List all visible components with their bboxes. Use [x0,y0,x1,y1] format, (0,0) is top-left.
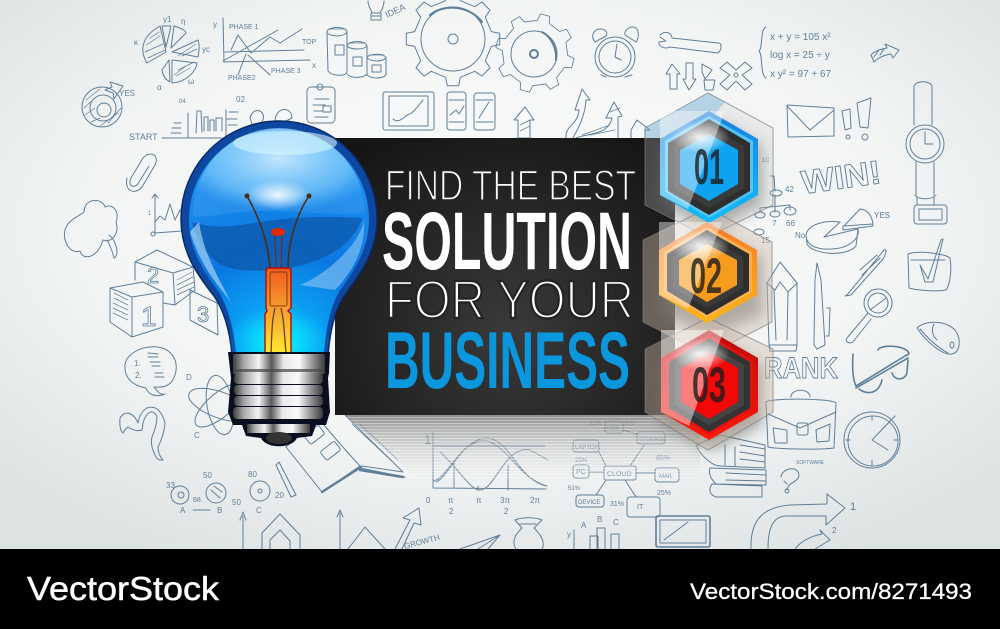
badge 01 [660,111,758,223]
doodle: equations: log x = 25 ÷ y [770,50,830,61]
doodle: 3D pie: No [795,231,806,240]
doodle: pie chart: γc [202,45,210,54]
doodle: pie chart: κ [134,38,139,47]
doodle: small pies: 20 [275,491,284,500]
filament bead [271,228,285,236]
doodle: small 3D bars: A [581,521,587,530]
doodle: small pies: A [180,506,186,515]
doodle: cloud diagram: 25% [575,458,588,464]
doodle: phase chart: x [312,61,316,70]
doodle: bar chart with start: 04 [179,99,186,105]
doodle: small 3D bars: y [567,530,571,539]
doodle: alarm clock [593,27,638,77]
doodle: large gear [406,0,500,86]
doodle: phase chart: PHASE2 [228,75,256,82]
doodle: sine wave chart: 2 [449,507,454,516]
badge 02 [659,222,757,323]
doodle: small pies: B [217,506,222,515]
doodle: large right arrow: 2 [832,526,837,535]
doodle: small curved arrow [871,44,899,62]
doodle: large right arrow [751,494,856,549]
doodle: 3D pie: YES [874,211,890,220]
dark crescent reflection [192,217,362,271]
doodle: cloud diagram: USB [607,426,619,432]
doodle: question [781,460,825,493]
black panel [335,138,675,415]
doodle: paper plane and money bag [460,518,543,549]
metal screw base [228,352,330,446]
doodle: bar chart with start: 02 [236,95,245,104]
badge 03 [661,330,758,440]
doodle: sine wave chart: 2 [504,507,509,516]
doodle: cloud diagram: 25% [657,490,671,497]
doodle: sine wave chart [424,432,548,516]
doodle: cloud diagram: 8% [625,421,634,427]
title line: solution: SOLUTION [382,196,632,287]
doodle: chart arrow with house: GROWTH [403,533,441,551]
doodle: org chart: 7 [772,219,777,228]
doodle: cloud diagram: 65% [656,455,670,462]
doodle: speech bubble: 1. [134,359,141,368]
doodle: cloud diagram: PC [576,469,586,476]
filament support wires [247,196,309,268]
glass tint [645,93,725,138]
doodle: glasses [853,346,909,393]
doodle: speech bubble: 2. [135,371,142,380]
doodle: phase chart: y [213,20,217,29]
doodle: three cans [327,28,386,78]
doodle: speech bubble [125,347,176,396]
doodle: cloud diagram: 11% [590,421,602,427]
doodle: small pies: 50 [203,471,212,480]
doodle: small 3D bars: B [597,515,602,524]
doodle: cloud diagram: MAIL [659,474,674,480]
doodle: paper clip [126,154,156,191]
doodle: small pies: C [256,506,262,515]
top highlight [193,128,365,217]
filament core [265,268,291,353]
doodle: bar chart with start [129,95,292,142]
doodle: stack of books [696,435,766,497]
doodle: sine wave chart: 0 [426,496,431,505]
doodle: cloud diagram: LAPTOP [575,445,599,451]
doodle: cloud diagram: DEVICE [578,500,600,506]
hexagon stack [643,93,773,450]
title line: business: BUSINESS [385,316,630,406]
doodle: small line chart [148,194,186,236]
doodle: phase chart: PHASE 3 [271,68,301,75]
doodle: equations [759,27,832,80]
doodle: wall clock [844,412,900,468]
doodle: bar chart with start: START [129,132,158,142]
bright glow [227,299,331,371]
doodle: checkbox [908,239,951,291]
doodle: sine wave chart: 3π [500,496,510,505]
number 02: 02 [690,248,722,304]
doodle: cloud diagram [568,421,679,517]
doodle: pie chart: γ1 [163,15,172,24]
doodle: wrench [659,32,721,53]
doodle: cloud diagram: 31% [610,501,624,508]
doodle: number cubes [110,250,218,337]
doodle: question: SOFTWARE [796,460,825,466]
doodle: pencils [767,250,886,351]
doodle: phase chart: TOP [302,39,317,46]
doodle: equations: x + y = 105 x² [770,32,831,43]
doodle: atom: D [186,373,192,382]
title line: find the best: FIND THE BEST [385,162,636,210]
doodle: org chart: 1C [762,158,770,164]
doodle: org chart: 42 [785,185,794,194]
doodle: cloud diagram: IT [637,504,644,511]
doodle: spiral arrow [82,82,135,127]
doodle: pie chart: α [157,83,162,92]
doodle: atom [185,373,255,440]
doodle: cloud diagram: 51% [568,486,581,492]
doodle: pie chart: η [181,17,185,26]
doodle: cloud diagram: CLOUD [607,471,632,478]
doodle: atom: C [194,431,200,440]
doodle: org chart [754,158,796,245]
doodle: small 3D bars: C [613,518,619,527]
number 01: 01 [694,139,724,195]
doodle: open book [276,415,405,497]
glass backing hexagons [643,93,773,450]
doodles: top and right [82,0,959,549]
doodle: WIN: WIN! [799,153,883,201]
doodles: left and bottom [64,154,766,551]
doodle: cloud diagram: STORAGE [639,437,666,443]
doodle: number cubes: 1 [141,301,157,332]
doodle: wristwatch [906,82,947,224]
light bulb [181,121,377,446]
doodle: equations: x y² = 97 + 67 [770,69,832,80]
doodle: chart arrow with house [240,508,441,551]
doodle: 3D pie [795,209,890,253]
doodle: org chart: 66 [786,219,795,228]
doodle: arrows and cross [666,62,752,90]
doodle: notes clipboard [307,84,335,123]
doodle: envelope and exclamation [787,98,871,140]
doodle: idea bulb: IDEA [384,2,407,20]
doodle: pie chart: ω [188,77,194,86]
doodle: sine wave chart: π [476,496,482,505]
doodle: number cubes: 2 [147,263,159,288]
doodle: RANK: RANK [764,352,838,385]
doodle: small pies: 68 [193,497,201,504]
doodle: spiral arrow: YES [119,89,135,98]
doodle: small pies: 50 [232,498,241,507]
doodle: briefcase [766,390,836,449]
doodle: org chart: 15 [761,236,770,245]
doodle: sine wave chart: 1 [424,432,431,447]
doodle: monitor [656,516,710,547]
doodle: magnifier [846,289,892,343]
footer url: VectorStock.com/8271493 [690,579,972,604]
doodle: large right arrow: 1 [850,501,856,513]
doodle: small pies: 33 [166,481,175,490]
doodle: sine wave chart: π [448,496,454,505]
number 03: 03 [692,357,726,413]
doodle: small 3D bars [567,515,619,549]
doodle: small pies [166,470,284,515]
footer logo: VectorStock [27,570,220,607]
title [382,162,636,406]
doodle: second gear [487,5,583,101]
doodle: phase chart: PHASE 1 [229,24,259,31]
title line: for your: FOR YOUR [385,270,634,330]
doodle: mouse [917,322,959,354]
doodle: small line chart: 1 [148,211,152,217]
hexagon shadows [662,118,762,450]
doodle: pie chart [134,15,210,92]
doodle: idea bulb [368,1,407,20]
panel shadow [345,415,700,490]
footer bar [0,549,1000,629]
doodle: tablet and phones [383,92,495,130]
doodle: cloud [64,200,117,258]
doodle: small pies: 80 [248,470,257,479]
doodle: sine wave chart: 2π [530,496,540,505]
bulb glass [181,121,377,355]
doodle: phase chart [213,18,317,82]
doodle: upward arrows [514,89,650,138]
doodle: number cubes: 3 [197,302,209,327]
doodle: large three [120,407,165,460]
